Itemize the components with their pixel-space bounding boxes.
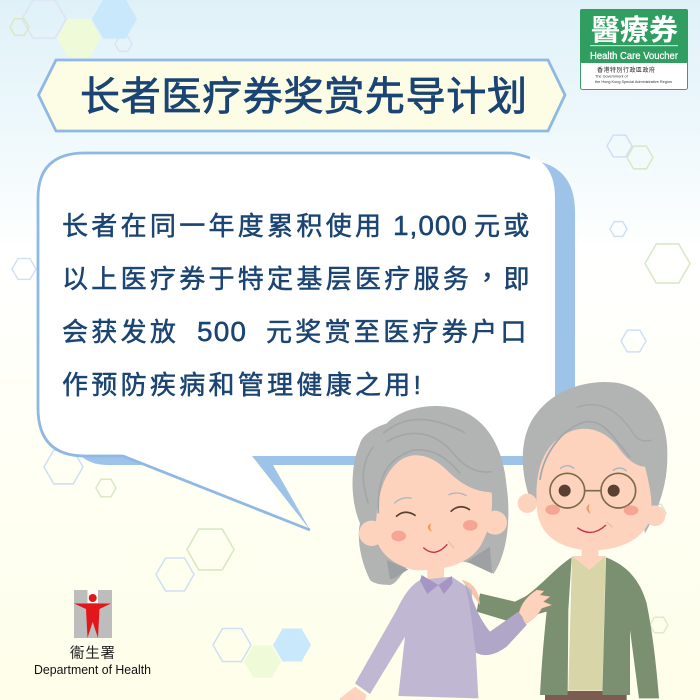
- bubble body: [38, 153, 555, 520]
- bubble text: 元或: [474, 211, 533, 241]
- bubble text: 500: [197, 316, 246, 347]
- woman: [340, 406, 552, 700]
- bubble text: 作预防疾病和管理健康之用!: [62, 370, 424, 400]
- bubble text: 1,000: [393, 210, 467, 241]
- title banner: [38, 60, 565, 131]
- logo: Health Care Voucher: [580, 9, 688, 90]
- logo: Department of Health: Department of Health: [34, 663, 151, 677]
- speech bubble: [38, 153, 575, 530]
- bubble text: 长者在同一年度累积使用: [62, 211, 384, 241]
- illustration: elderly couple: [340, 382, 667, 700]
- bubble text: ，: [481, 255, 510, 285]
- bubble text: 会获发放: [62, 317, 179, 347]
- bubble text: 元奖赏至医疗券户口: [266, 317, 530, 347]
- bubble text: 即: [504, 264, 530, 294]
- logo: Health Care Voucher: 醫療券: [591, 14, 678, 47]
- bubble text: [62, 210, 533, 400]
- logo: Department of Health: [34, 590, 151, 677]
- logo: Health Care Voucher: Health Care Voucher: [590, 50, 678, 62]
- bubble shadow: [70, 160, 575, 530]
- bubble text: 以上医疗券于特定基层医疗服务: [62, 264, 472, 294]
- logo: Health Care Voucher: 香港特別行政區政府: [597, 66, 655, 74]
- man: [477, 382, 667, 700]
- title: 长者医疗券奖赏先导计划: [80, 75, 527, 119]
- logo: Health Care Voucher: the Hong Kong Special Administrative Region: [595, 80, 672, 84]
- logo: Health Care Voucher: The Government of: [595, 74, 629, 78]
- man's hand on shoulder: [462, 580, 480, 605]
- logo: Department of Health: 衞生署: [70, 645, 115, 662]
